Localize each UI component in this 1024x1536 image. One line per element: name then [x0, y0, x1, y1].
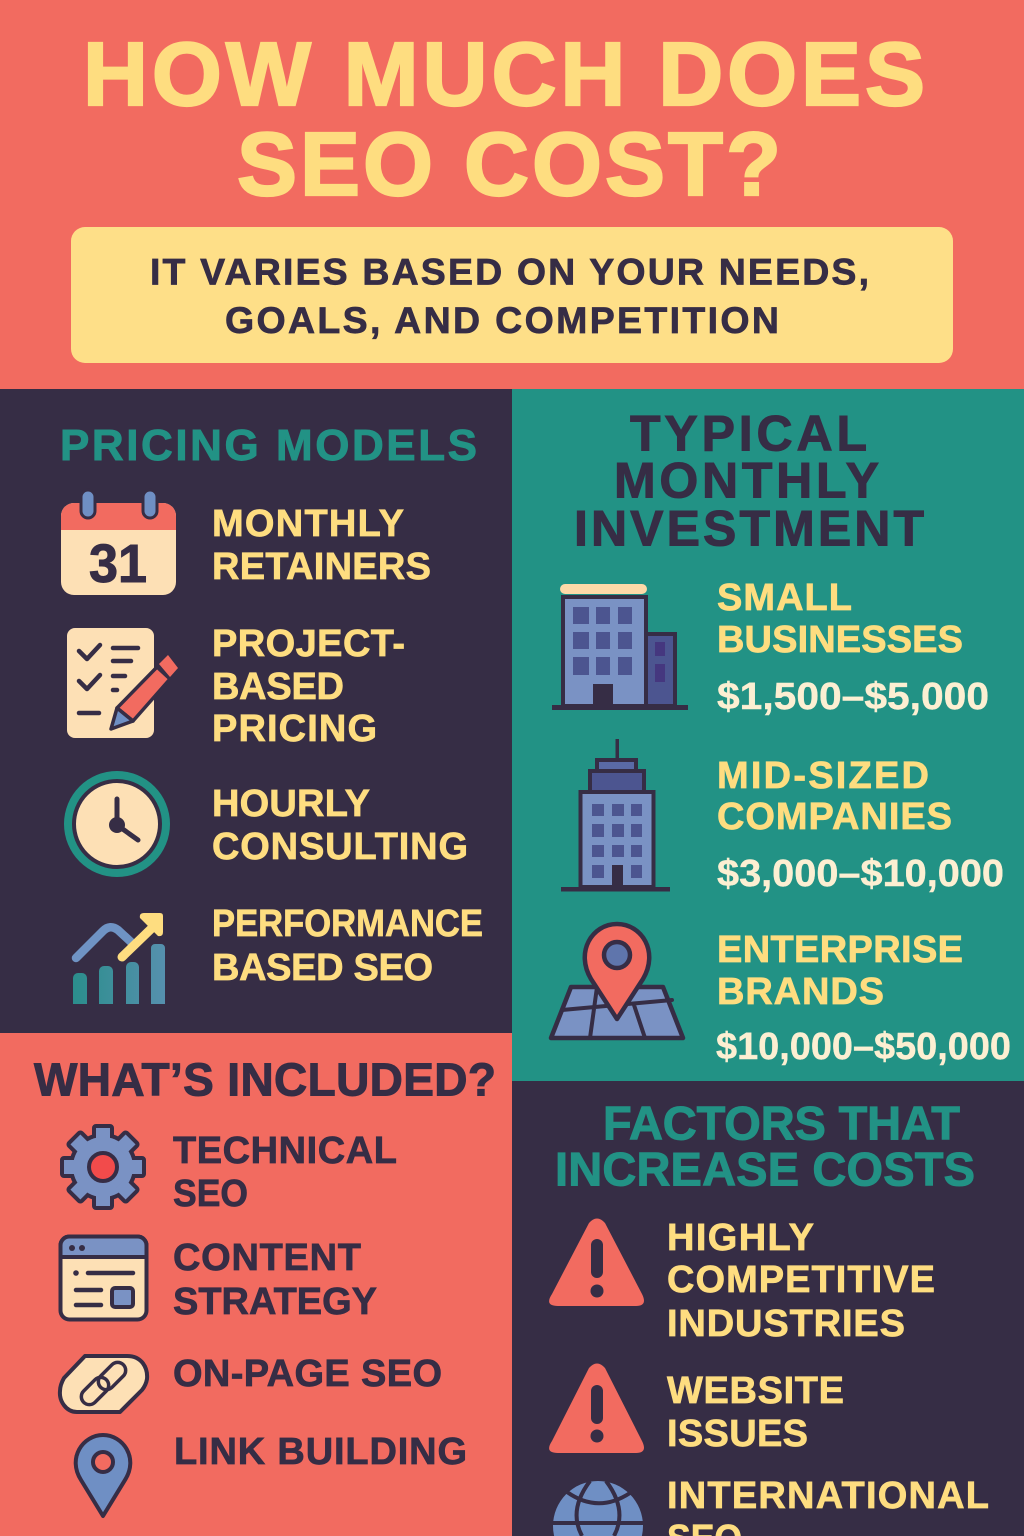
label: small businesses: SMALL	[717, 577, 852, 619]
heading: pricing models: PRICING MODELS	[60, 421, 477, 470]
heading: typical monthly investment: TYPICAL	[630, 406, 867, 462]
label: technical seo	[173, 1130, 397, 1215]
label: enterprise brands: BRANDS	[717, 971, 884, 1013]
label: enterprise brands	[717, 929, 963, 1013]
heading: what's included: WHAT’S INCLUDED?	[34, 1054, 496, 1106]
header panel	[0, 0, 1024, 389]
heading: factors that increase costs	[555, 1096, 975, 1196]
callout: subtitle: GOALS, AND COMPETITION	[225, 299, 779, 341]
label: technical seo: TECHNICAL	[173, 1130, 397, 1172]
label: monthly retainers: MONTHLY	[212, 503, 404, 545]
label: small businesses	[717, 577, 963, 661]
callout: subtitle	[71, 227, 953, 363]
label: international seo	[667, 1475, 989, 1536]
price: mid-sized companies: $3,000–$10,000	[717, 853, 1004, 895]
label: content strategy	[173, 1237, 377, 1323]
panel: what's included	[0, 1033, 512, 1536]
icon: location pin	[76, 1435, 130, 1516]
heading: typical monthly investment: MONTHLY	[614, 452, 879, 508]
label: link building: LINK BUILDING	[174, 1431, 467, 1473]
label: enterprise brands: ENTERPRISE	[717, 929, 963, 971]
label: international seo: INTERNATIONAL	[667, 1475, 989, 1517]
label: performance based seo: BASED SEO	[212, 947, 433, 989]
label: highly competitive industries: INDUSTRIES	[667, 1303, 905, 1345]
label: mid-sized companies	[717, 755, 952, 838]
icon: clock	[64, 771, 170, 877]
icon: warning triangle	[549, 1218, 644, 1306]
icon: calendar	[61, 490, 176, 595]
label: hourly consulting: HOURLY	[212, 783, 370, 825]
icon: link tag	[60, 1356, 147, 1412]
label: highly competitive industries: COMPETITIVE	[667, 1259, 935, 1301]
icon: map with pin	[551, 924, 683, 1038]
icon: small office building	[552, 584, 688, 710]
price: small businesses: $1,500–$5,000	[717, 676, 989, 718]
label: website issues: ISSUES	[667, 1413, 808, 1455]
label: project-based pricing: PRICING	[212, 708, 377, 750]
title: HOW MUCH DOES	[83, 25, 925, 125]
label: website issues	[667, 1370, 844, 1455]
label: hourly consulting	[212, 783, 468, 868]
icon: calendar: 31	[89, 534, 147, 594]
label: project-based pricing: BASED	[212, 666, 344, 708]
icon: tower building	[561, 739, 670, 892]
label: hourly consulting: CONSULTING	[212, 826, 468, 868]
label: performance based seo	[212, 903, 483, 989]
icon: warning triangle	[549, 1364, 644, 1453]
heading: typical monthly investment: INVESTMENT	[574, 500, 924, 556]
panel: typical monthly investment	[512, 389, 1024, 1081]
label: small businesses: BUSINESSES	[717, 619, 963, 661]
label: on-page seo: ON-PAGE SEO	[173, 1353, 442, 1395]
heading: typical monthly investment	[574, 406, 924, 556]
price: enterprise brands: $10,000–$50,000	[716, 1026, 1011, 1068]
heading: factors that increase costs: FACTORS THAT	[603, 1096, 960, 1150]
panel: pricing models	[0, 389, 512, 1033]
label: content strategy: STRATEGY	[173, 1281, 377, 1323]
label: technical seo: SEO	[173, 1173, 248, 1215]
icon: growth chart	[73, 913, 165, 1004]
callout: subtitle: IT VARIES BASED ON YOUR NEEDS,	[150, 250, 869, 292]
label: project-based pricing	[212, 623, 405, 750]
heading: factors that increase costs: INCREASE COSTS	[555, 1142, 975, 1196]
label: content strategy: CONTENT	[173, 1237, 361, 1279]
label: mid-sized companies: MID-SIZED	[717, 755, 929, 797]
panel: factors that increase costs	[512, 1081, 1024, 1536]
label: highly competitive industries: HIGHLY	[667, 1217, 814, 1259]
icon: browser window	[60, 1236, 146, 1320]
label: monthly retainers	[212, 503, 431, 588]
icon: checklist and pencil	[67, 628, 178, 738]
title: SEO COST?	[237, 115, 781, 215]
label: highly competitive industries	[667, 1217, 935, 1345]
icon: globe	[553, 1481, 643, 1536]
label: website issues: WEBSITE	[667, 1370, 844, 1412]
label: project-based pricing: PROJECT-	[212, 623, 405, 665]
title	[83, 25, 925, 215]
label: monthly retainers: RETAINERS	[212, 546, 431, 588]
label: mid-sized companies: COMPANIES	[717, 796, 952, 838]
icon: gear	[64, 1128, 142, 1206]
label: performance based seo: PERFORMANCE	[212, 903, 483, 945]
